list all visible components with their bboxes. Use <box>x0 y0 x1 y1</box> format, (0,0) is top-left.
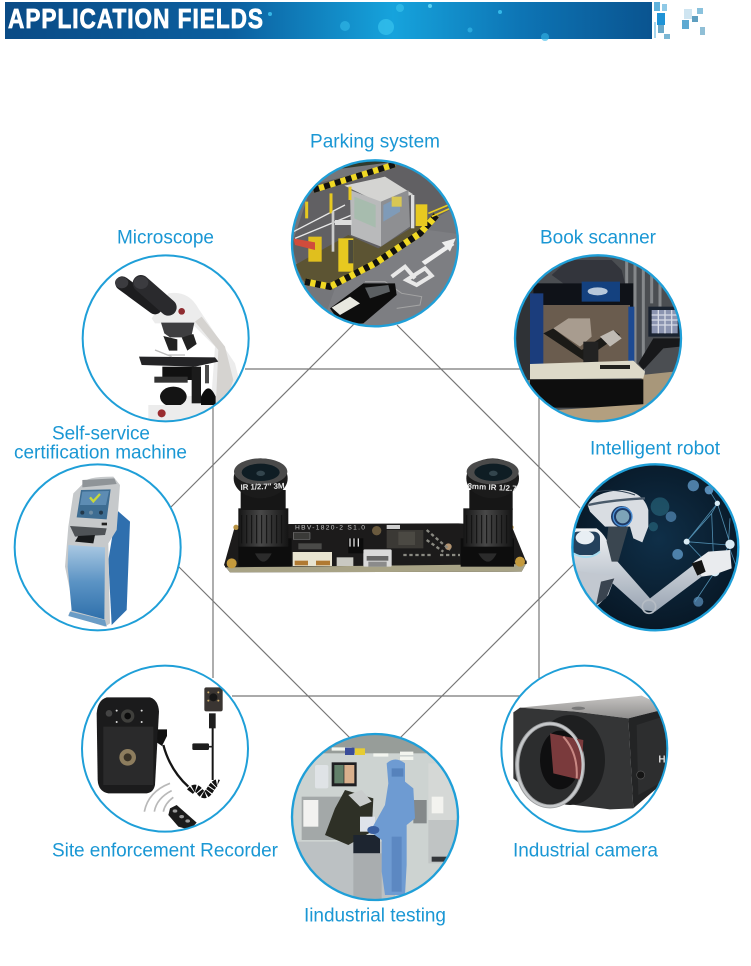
camera circle outline <box>501 666 667 832</box>
label: self-service certification machine: certification machine <box>14 442 187 464</box>
panel: self-service machine <box>14 463 182 632</box>
left lens <box>234 458 292 567</box>
label: intelligent robot: Intelligent robot <box>590 438 721 460</box>
kiosk illustration <box>65 476 130 627</box>
circuit board <box>224 523 527 572</box>
label: site enforcement recorder: Site enforcement Recorder <box>52 840 279 862</box>
recorder illustration <box>96 687 223 828</box>
connector lines <box>170 324 580 738</box>
book scanner illustration <box>516 256 680 420</box>
left lens: IR 1/2.7" 3M <box>240 481 285 492</box>
header banner <box>5 2 652 41</box>
board silkscreen: HBV-1820-2 S1.0 <box>295 524 365 531</box>
robot illustration <box>574 466 738 630</box>
parking illustration <box>293 162 457 326</box>
label: self-service certification machine: Self-service <box>52 424 150 444</box>
label: self-service certification machine <box>14 424 187 464</box>
kiosk circle outline <box>15 464 181 630</box>
industrial camera illustration: H <box>658 754 666 765</box>
right lens: 8mm IR 1/2.7 <box>467 482 518 493</box>
robot circle outline <box>572 464 738 630</box>
heading: APPLICATION FIELDS <box>8 3 264 34</box>
panel: book scanner <box>514 254 682 422</box>
panel: microscope <box>82 254 250 422</box>
label: industrial testing: Iindustrial testing <box>304 906 446 926</box>
recorder circle outline <box>82 666 248 832</box>
label: industrial camera: Industrial camera <box>513 840 658 862</box>
cleanroom illustration <box>293 735 457 899</box>
panel: parking system <box>290 159 460 328</box>
panel: industrial testing <box>290 732 460 902</box>
parking circle outline <box>292 160 458 326</box>
microscope circle outline <box>83 255 249 421</box>
panel: site enforcement recorder <box>81 664 249 833</box>
panel: industrial camera <box>500 664 668 833</box>
microscope illustration <box>115 275 238 420</box>
industrial camera illustration <box>513 696 666 810</box>
right lens <box>461 458 519 567</box>
banner pixel decoration <box>654 2 705 39</box>
center product: stereo camera module <box>224 458 527 572</box>
testing circle outline <box>292 734 458 900</box>
panel: intelligent robot <box>571 463 740 632</box>
book scanner circle outline <box>515 255 681 421</box>
label: parking system: Parking system <box>310 132 440 152</box>
label: microscope: Microscope <box>117 228 214 248</box>
label: book scanner: Book scanner <box>540 228 657 248</box>
